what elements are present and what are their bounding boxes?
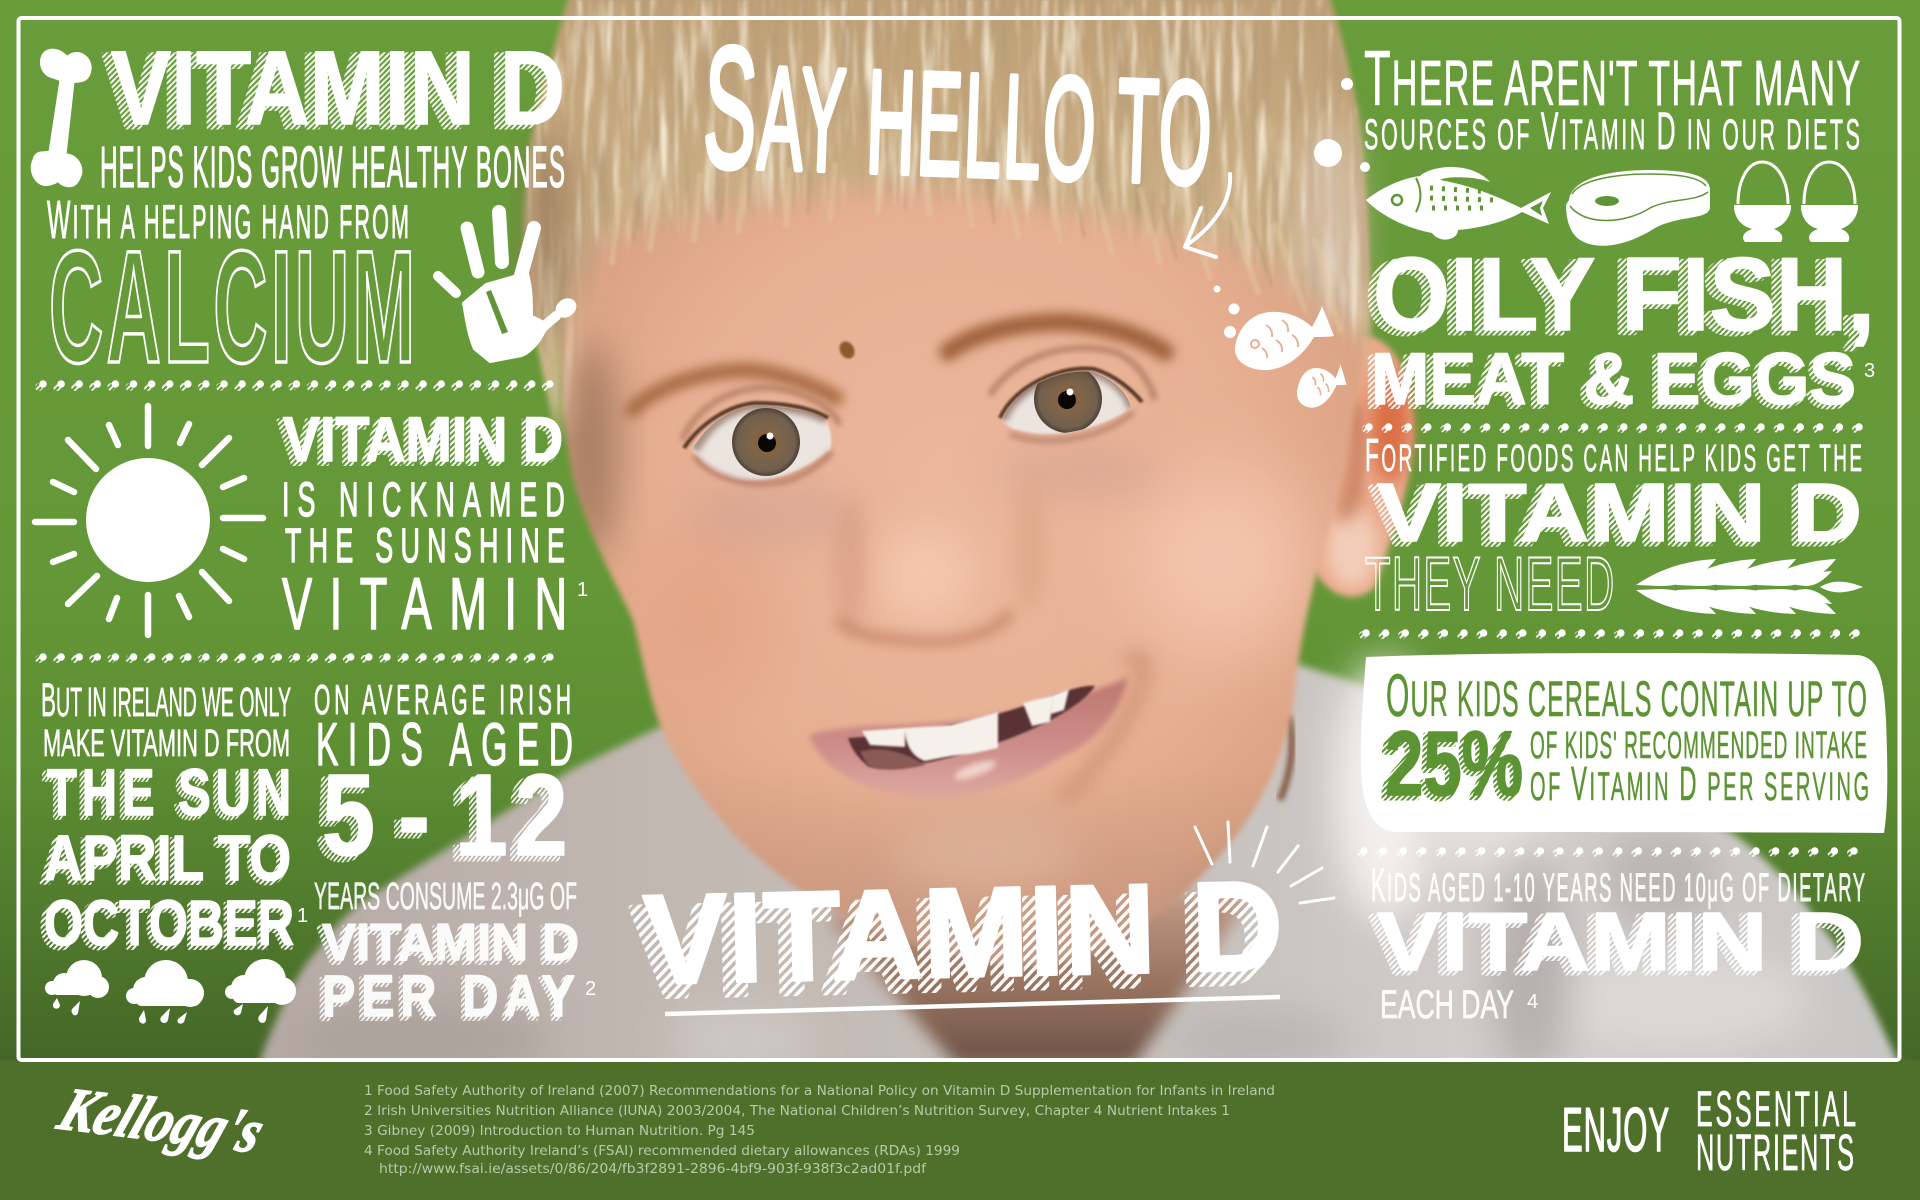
heading: the sun: THE SUN [47,756,291,830]
text: kids aged: KIDS AGED [316,712,573,779]
outlined text: calcium: CALCIUM [49,219,415,397]
footnote mark 1: 1 [577,579,588,601]
text: years consume: YEARS CONSUME 2.3μG OF [314,876,577,918]
heading: vitamin d: VITAMIN D [1377,466,1862,559]
text: is nicknamed: IS NICKNAMED [282,474,565,527]
icon: emphasis rays [1195,822,1334,903]
icon: fish [1366,167,1551,240]
footnote mark 1: 1 [297,905,308,927]
panel: food sources [1364,36,1875,423]
panel: sunshine vitamin [35,405,588,645]
text: make vitamin d from: MAKE VITAMIN D FROM [43,723,290,765]
divider dots left 1 [39,384,565,387]
arrow [1185,174,1230,257]
outlined text: they need: THEY NEED [1365,541,1614,626]
text: the sunshine: THE SUNSHINE [285,520,565,573]
references: http://www.fsai.ie/assets/0/86/204/fb3f2891-2896-4bf9-903f-938f3c2ad01f.pdf [379,1161,927,1177]
underline [665,997,1280,1014]
heading: vitamin d: VITAMIN D [111,30,565,147]
footnote mark 4: 4 [1527,991,1538,1013]
number: 25%: 25% [1381,716,1521,818]
heading: vitamin d: VITAMIN D [322,914,579,972]
heading: say hello to: SAY HELLO TO [701,12,1215,221]
photo: smiling boy [261,0,1902,1080]
eyebrows [632,322,1165,410]
text: vitamin: VITAMIN [282,563,567,645]
text: on average irish: ON AVERAGE IRISH [314,677,571,724]
footer [49,1075,1856,1181]
callout: cereals 25% [1361,653,1887,833]
heading: per day: PER DAY [322,965,575,1029]
text: with a helping hand from: WITH A HELPING HAND FROM [47,189,409,250]
heading: april to: APRIL TO [44,822,291,894]
heading: vitamin d: VITAMIN D [318,917,576,975]
heading: vitamin d: VITAMIN D [1370,898,1858,991]
heading: meat and eggs: MEAT & EGGS [1371,339,1856,420]
references: 1 Food Safety Authority of Ireland (2007) Recommendations for a National Policy on Vitamin D Supplementation for Infants in Ireland [364,1083,1275,1099]
eye right [990,348,1155,441]
shirt [261,664,1902,1070]
heading: vitamin d: VITAMIN D [1377,895,1864,988]
logo: kellogg's: Kellogg's [49,1075,274,1166]
heading: october: OCTOBER [44,887,294,959]
panel: bones [32,30,580,397]
shirt folds [290,660,1810,1080]
icon: steak [1566,170,1710,246]
references: 3 Gibney (2009) Introduction to Human Nutrition. Pg 145 [364,1123,755,1139]
neck [825,890,1255,1066]
footnote mark 2: 2 [585,978,596,1000]
icon: sun [35,406,263,635]
panel: sun april to october [40,673,308,1024]
divider dots right 2 [1363,633,1863,635]
heading: october: OCTOBER [40,890,292,962]
icon: bone [32,50,90,186]
footnote mark 3: 3 [1864,360,1875,382]
heading: vitamin d: VITAMIN D [283,405,563,475]
heading: the sun: THE SUN [43,759,287,833]
text: kids aged 1-10: KIDS AGED 1-10 YEARS NEED 10μG OF DIETARY [1371,859,1865,911]
divider dots right 1 [1366,427,1865,429]
text: fortified foods: FORTIFIED FOODS CAN HELP KIDS GET THE [1365,429,1862,481]
icon: rain clouds [45,959,296,1024]
tagline: nutrients: NUTRIENTS [1696,1124,1854,1181]
icon: handprint [438,212,580,362]
heading: meat and eggs: MEAT & EGGS [1365,342,1853,423]
heading: vitamin d: VITAMIN D [1370,469,1858,562]
heading: vitamin d centre: VITAMIN D [631,867,1274,1024]
ear [1308,336,1414,597]
heading: april to: APRIL TO [40,825,288,897]
tagline: enjoy: ENJOY [1562,1097,1669,1165]
references: 4 Food Safety Authority Ireland’s (FSAI) recommended dietary allowances (RDAs) 1999 [364,1143,960,1159]
smile crease and chin [1060,657,1145,800]
heading: vitamin d: VITAMIN D [103,33,555,150]
hair [524,0,1372,440]
heading: vitamin d: VITAMIN D [278,408,560,478]
text: sources of vitamin d: SOURCES OF VITAMIN D IN OUR DIETS [1364,101,1860,160]
heading: oily fish: OILY FISH, [1373,237,1875,353]
panel: daily need [1370,859,1865,1027]
nose [875,527,975,623]
number: 5 - 12: 5-12 [316,755,562,884]
icon: wheat [1636,559,1863,614]
heading: oily fish: OILY FISH, [1366,240,1866,356]
text: of vitamin d per serving: OF VITAMIN D PER SERVING [1530,758,1869,811]
panel: sun april to october: BUT IN IRELAND WE ONLY [41,673,291,726]
divider dots left 2 [39,657,565,659]
text: our kids cereals: OUR KIDS CEREALS CONTAIN UP TO [1386,663,1867,730]
text: there aren't that many: THERE AREN'T THAT MANY [1364,36,1860,122]
icon: eggs in cups [1734,162,1858,242]
panel: fortified foods [1365,429,1863,626]
text: helps kids grow healthy bones: HELPS KIDS GROW HEALTHY BONES [100,136,565,200]
mole [838,340,856,360]
references [364,1083,1275,1177]
heading: per day: PER DAY [318,968,573,1032]
text: of kids recommended intake: OF KIDS' RECOMMENDED INTAKE [1530,725,1867,767]
fringe wisps [612,165,1340,330]
teeth [862,689,1069,761]
footer band [0,1060,1920,1200]
references: 2 Irish Universities Nutrition Alliance (IUNA) 2003/2004, The National Children’s Nutrition Survey, Chapter 4 Nutrient Intakes 1 [364,1103,1230,1119]
face skin [558,168,1370,967]
number: 5 - 12: 5-12 [322,751,568,880]
icon: bubbles and fish on face [1214,78,1370,408]
panel: kids consumption [314,677,596,1032]
tagline: essential: ESSENTIAL [1696,1082,1856,1137]
callout box [1361,653,1887,833]
text: each day: EACH DAY [1380,983,1514,1027]
heading: vitamin d centre: VITAMIN D [641,855,1284,1012]
divider dots right 3 [1361,851,1865,853]
number: 25%: 25% [1385,713,1523,815]
eye left [682,388,840,484]
mouth [809,677,1127,799]
collar shadow [1280,715,1292,800]
